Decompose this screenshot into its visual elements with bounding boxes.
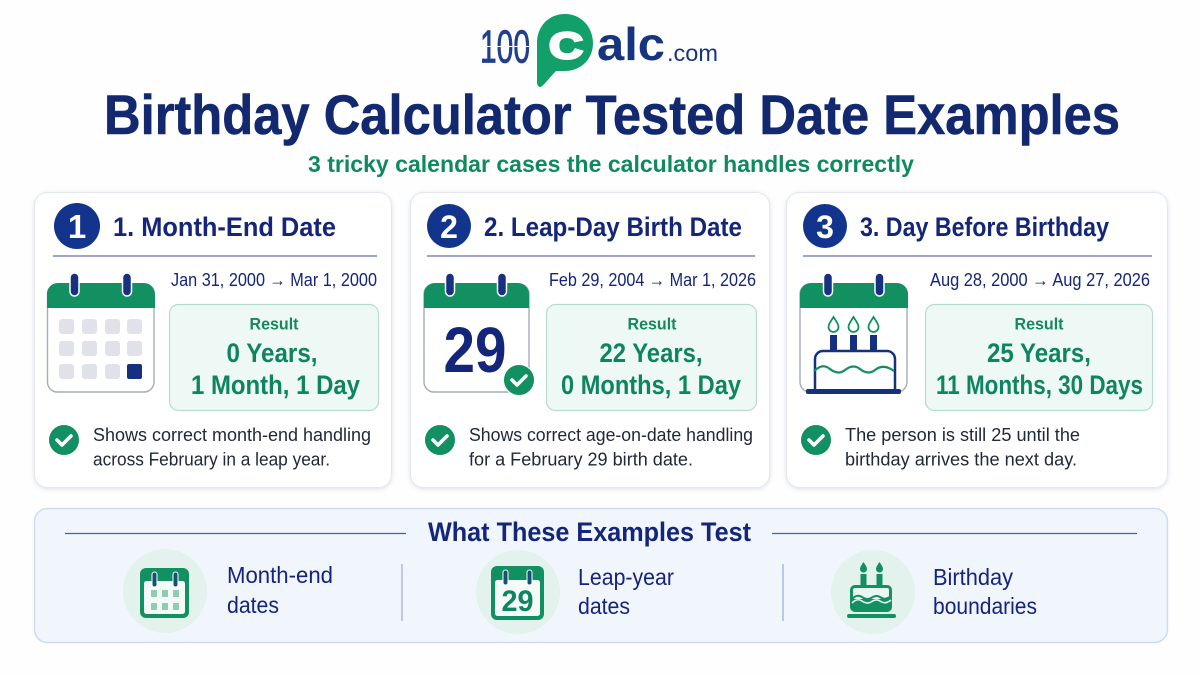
label: Birthday	[933, 564, 1013, 590]
note: Shows correct age-on-date handling	[469, 425, 753, 445]
panel: day before birthday	[786, 192, 1168, 488]
logo alc: alc	[597, 18, 665, 70]
item: month-end dates	[123, 549, 333, 633]
note: for a February 29 birth date.	[469, 450, 693, 470]
note	[93, 425, 371, 470]
icon: check	[801, 425, 831, 455]
number badge 1: 1	[68, 208, 86, 245]
heading: 1. Month-End Date	[113, 212, 336, 242]
heading: 3. Day Before Birthday	[860, 212, 1109, 242]
note: birthday arrives the next day.	[845, 450, 1077, 470]
label	[578, 564, 674, 619]
result box: Result	[250, 314, 299, 334]
note	[469, 425, 753, 470]
number badge 1	[54, 203, 100, 249]
note: Shows correct month-end handling	[93, 425, 371, 445]
number badge 2: 2	[440, 209, 458, 245]
date range: Feb 29, 2004 → Mar 1, 2026	[549, 270, 756, 290]
heading: 2. Leap-Day Birth Date	[484, 212, 742, 242]
logo	[478, 14, 718, 87]
label: dates	[227, 592, 279, 618]
result box: 25 Years,	[987, 338, 1091, 368]
label: dates	[578, 593, 630, 619]
result box: Result	[628, 314, 677, 334]
section heading: What These Examples Test	[428, 517, 751, 547]
result box: 11 Months, 30 Days	[936, 370, 1143, 400]
result box: 0 Months, 1 Day	[561, 370, 741, 400]
label: boundaries	[933, 593, 1037, 619]
subtitle: 3 tricky calendar cases the calculator handles correctly	[308, 151, 914, 177]
result box: 1 Month, 1 Day	[191, 370, 360, 400]
icon: calendar grid	[47, 273, 155, 392]
result box	[926, 304, 1152, 410]
result box: Result	[1014, 314, 1064, 334]
icon: check	[49, 425, 79, 455]
item: birthday boundaries	[831, 550, 1037, 634]
icon: calendar 29	[491, 566, 544, 620]
icon: calendar with cake	[800, 273, 908, 394]
note: across February in a leap year.	[93, 450, 330, 470]
label	[227, 562, 333, 618]
logo digits: 100	[480, 20, 530, 72]
result box: 22 Years,	[600, 338, 702, 368]
title: Birthday Calculator Tested Date Examples	[104, 83, 1120, 146]
icon: calendar 29	[424, 273, 534, 396]
note: The person is still 25 until the	[845, 425, 1080, 445]
icon: check	[425, 425, 455, 455]
result box	[170, 304, 378, 410]
label: Leap-year	[578, 564, 674, 590]
icon: calendar	[140, 568, 189, 618]
result box	[546, 304, 756, 410]
icon: calendar 29: 29	[502, 585, 534, 618]
logo .com: .com	[667, 40, 718, 66]
logo C: C	[549, 26, 583, 66]
panel: leap-day birth date	[410, 192, 770, 488]
date range: Jan 31, 2000 → Mar 1, 2000	[171, 270, 377, 290]
label	[933, 564, 1037, 619]
panel: month-end date	[34, 192, 392, 488]
panel: what these examples test	[34, 508, 1168, 642]
date range: Aug 28, 2000 → Aug 27, 2026	[930, 270, 1150, 290]
number badge 3: 3	[816, 209, 834, 245]
note	[845, 425, 1080, 470]
number badge 2	[427, 204, 471, 248]
item: leap-year dates	[476, 550, 674, 634]
result box: 0 Years,	[226, 338, 318, 368]
icon: calendar 29: 29	[444, 314, 506, 386]
label: Month-end	[227, 562, 333, 588]
icon: cake	[847, 562, 896, 618]
number badge 3	[803, 204, 847, 248]
